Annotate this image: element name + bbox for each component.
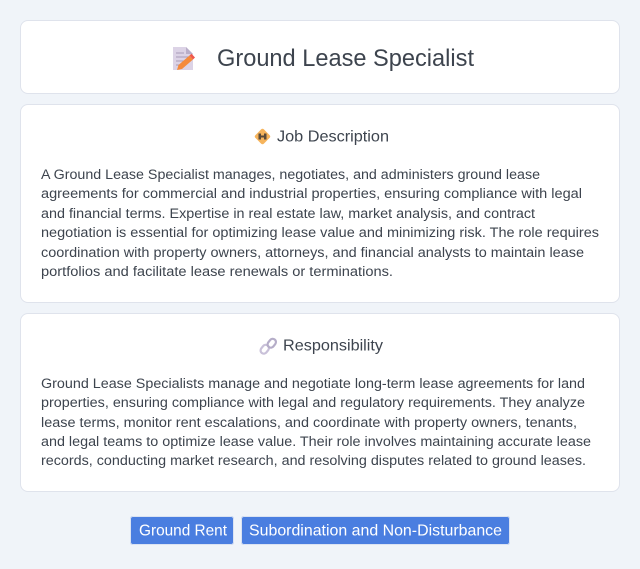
text block: job description: and financial terms. Expertise in real estate law, market analysis, and contract <box>41 206 535 222</box>
text block: responsibility: and legal teams to optimize lease value. Their role involves maintaining accurate lease <box>41 434 591 450</box>
text block: job description: coordination with property owners, attorneys, and financial analysts to maintain lease <box>41 245 584 261</box>
text block: job description: agreements for commercial and industrial properties, ensuring compliance with legal <box>41 186 582 202</box>
text block: job description: A Ground Lease Specialist manages, negotiates, and administers ground lease <box>41 167 540 183</box>
panel: title <box>20 20 620 94</box>
text block: job description: negotiation is essential for optimizing lease value and minimizing risk. The role requires <box>41 225 599 241</box>
label: Ground Rent: Ground Rent <box>139 522 228 540</box>
text block: job description <box>41 167 599 280</box>
text block: job description: portfolios and facilitate lease renewals or terminations. <box>41 264 393 280</box>
text block: responsibility: records, conducting market research, and resolving disputes related to ground leases. <box>41 453 586 469</box>
icon: job description diamond <box>254 128 271 145</box>
text block: responsibility <box>41 376 591 469</box>
icon: document with pencil <box>173 47 195 70</box>
panel: job description <box>20 104 620 303</box>
icon: link <box>259 338 277 355</box>
title: Ground Lease Specialist <box>217 45 474 72</box>
heading: responsibility: Responsibility <box>283 338 383 354</box>
label: Subordination and Non-Disturbance: Subordination and Non-Disturbance <box>249 522 502 540</box>
text block: responsibility: Ground Lease Specialists manage and negotiate long-term lease agreements for land <box>41 376 585 392</box>
heading: job description: Job Description <box>277 128 389 146</box>
tag: Ground Rent <box>130 516 234 545</box>
panel: responsibility <box>20 313 620 492</box>
text block: responsibility: lease terms, monitor rent escalations, and coordinate with property owners, tenants, <box>41 415 577 431</box>
tag: Subordination and Non-Disturbance <box>241 516 510 545</box>
text block: responsibility: properties, ensuring compliance with legal and regulatory requirements. They analyze <box>41 395 585 411</box>
